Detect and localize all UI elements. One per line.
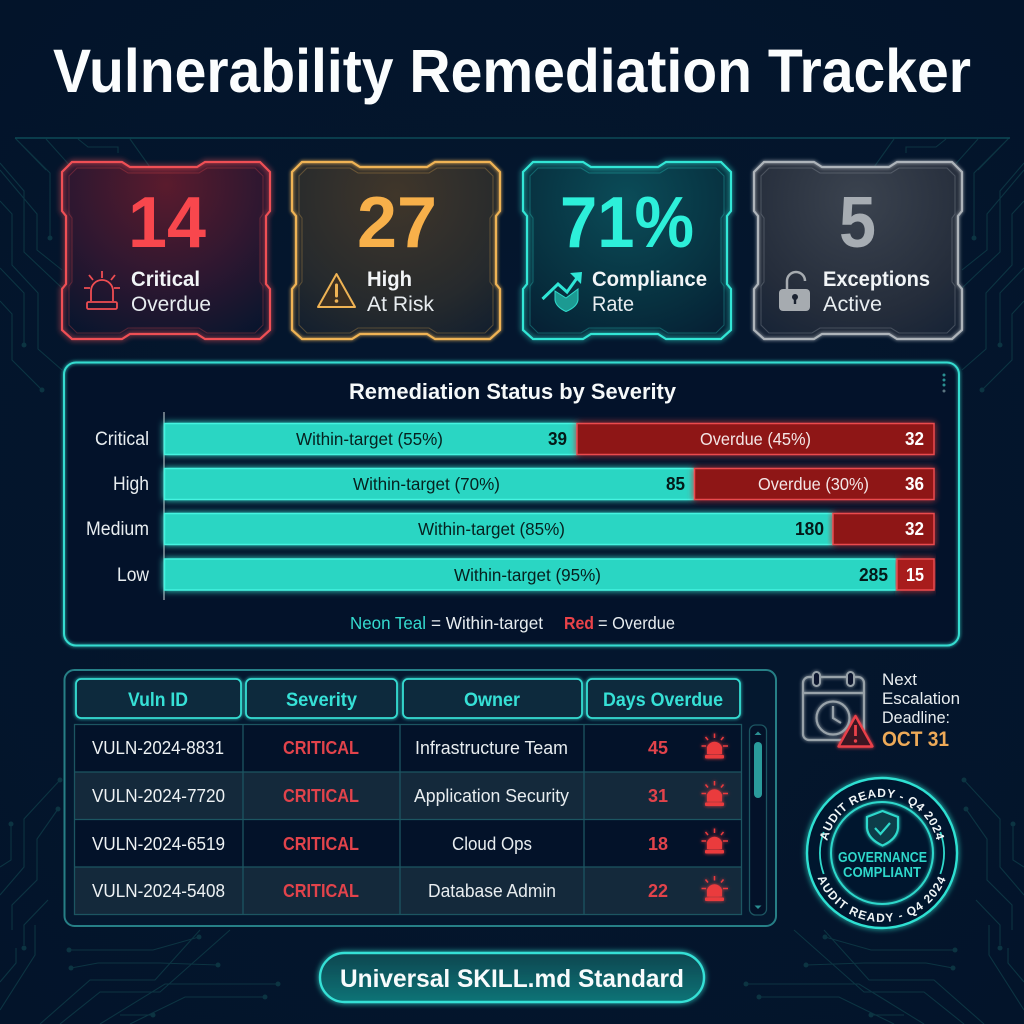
chart legend: Neon Teal	[350, 613, 426, 633]
rate label: Rate	[592, 293, 634, 316]
icon: siren outline	[84, 271, 120, 309]
row: VULN-2024-7720: VULN-2024-7720	[92, 785, 225, 806]
row: medium: Within-target (85%)	[418, 519, 565, 539]
row: VULN-2024-6519: Cloud Ops	[452, 833, 532, 854]
seal compliant text: COMPLIANT	[843, 865, 921, 881]
icon: calendar with clock and alert	[803, 672, 872, 746]
panel: overdue vulnerabilities table	[64, 670, 776, 926]
y axis line	[163, 412, 165, 600]
table header labels	[128, 690, 723, 711]
badge: governance compliant seal	[801, 772, 963, 934]
compliance percentage: 71%	[560, 183, 694, 263]
exceptions count: 5	[839, 183, 876, 263]
icon: open padlock	[779, 272, 810, 311]
table grid	[74, 724, 742, 915]
row: high: 85	[666, 474, 685, 494]
seal top text: AUDIT READY - Q4 2024	[820, 788, 944, 841]
at risk label: At Risk	[367, 293, 434, 316]
row: VULN-2024-8831: CRITICAL	[283, 737, 359, 758]
footer pill: universal skill standard: Universal SKILL.md Standard	[340, 965, 684, 993]
row: medium	[86, 514, 934, 544]
row: VULN-2024-8831: VULN-2024-8831	[92, 737, 224, 758]
row: medium: Medium	[86, 519, 149, 540]
overdue label: Overdue	[131, 293, 211, 316]
icon: trend arrow with shield	[542, 272, 582, 312]
table header cells	[76, 679, 740, 718]
table header labels: Vuln ID	[128, 690, 188, 711]
chart legend: = Within-target	[431, 613, 543, 633]
row: VULN-2024-5408: CRITICAL	[283, 880, 359, 901]
row: high	[113, 468, 934, 500]
row: VULN-2024-5408	[92, 876, 728, 901]
footer pill: universal skill standard	[320, 953, 704, 1002]
title: Vulnerability Remediation Tracker	[53, 37, 971, 105]
row: critical: Overdue (45%)	[700, 429, 811, 449]
chart heading: Remediation Status by Severity	[349, 379, 677, 404]
high count: 27	[357, 183, 437, 263]
row: VULN-2024-7720: CRITICAL	[283, 785, 359, 806]
row: VULN-2024-6519	[92, 828, 728, 854]
critical label: Critical	[131, 268, 200, 291]
high label: High	[367, 268, 412, 291]
row: VULN-2024-5408: Database Admin	[428, 880, 556, 901]
row: high: Overdue (30%)	[758, 474, 869, 494]
chart legend: = Overdue	[598, 613, 675, 633]
row: VULN-2024-8831: Infrastructure Team	[415, 737, 568, 758]
row: critical: Within-target (55%)	[296, 429, 443, 449]
menu dots	[942, 374, 946, 392]
icon: warning triangle	[318, 274, 355, 307]
row: high: Within-target (70%)	[353, 474, 500, 494]
compliance label: Compliance	[592, 268, 707, 291]
row: critical	[95, 424, 934, 454]
row: critical: 39	[548, 429, 567, 449]
row: low	[117, 559, 934, 590]
exceptions label: Exceptions	[823, 268, 930, 291]
row: medium: 32	[905, 519, 924, 539]
row: VULN-2024-7720	[92, 781, 728, 806]
row: low: Within-target (95%)	[454, 565, 601, 585]
row: high: 36	[905, 474, 924, 494]
critical count: 14	[128, 183, 206, 263]
row: critical: Critical	[95, 429, 149, 450]
chart legend: Red	[564, 613, 594, 633]
row: VULN-2024-6519: 18	[648, 833, 668, 854]
chart legend	[350, 613, 675, 633]
row: VULN-2024-6519: CRITICAL	[283, 833, 359, 854]
row: VULN-2024-8831: 45	[648, 737, 668, 758]
icon: shield check	[867, 811, 898, 846]
escalation deadline text	[882, 671, 960, 751]
escalation deadline text: Escalation	[882, 690, 960, 708]
row: VULN-2024-7720: 31	[648, 785, 668, 806]
table header labels: Owner	[464, 690, 521, 711]
table header labels: Severity	[286, 690, 357, 711]
row: VULN-2024-8831	[92, 734, 728, 758]
seal governance text: GOVERNANCE	[838, 850, 927, 866]
row: VULN-2024-5408: 22	[648, 880, 668, 901]
panel: remediation status chart	[64, 362, 959, 646]
row: VULN-2024-5408: VULN-2024-5408	[92, 880, 225, 901]
escalation deadline text: Next	[882, 671, 917, 689]
row: VULN-2024-6519: VULN-2024-6519	[92, 833, 225, 854]
panel: compliance rate KPI card	[523, 162, 731, 339]
row: VULN-2024-7720: Application Security	[414, 785, 570, 806]
panel: active exceptions KPI card	[754, 162, 962, 339]
scrollbar	[750, 725, 766, 915]
row: medium: 180	[795, 519, 824, 539]
seal bottom text: AUDIT READY - Q4 2024	[818, 876, 946, 922]
row: critical: 32	[905, 429, 924, 449]
deadline date: OCT 31	[882, 728, 949, 751]
panel: high at risk KPI card	[292, 162, 500, 339]
active label: Active	[823, 293, 882, 316]
table header labels: Days Overdue	[603, 690, 723, 711]
escalation deadline text: Deadline:	[882, 709, 950, 727]
row: low: 285	[859, 565, 888, 585]
row: low: 15	[906, 565, 924, 585]
row: low: Low	[117, 565, 149, 586]
panel: critical overdue KPI card	[62, 162, 270, 339]
row: high: High	[113, 474, 149, 495]
